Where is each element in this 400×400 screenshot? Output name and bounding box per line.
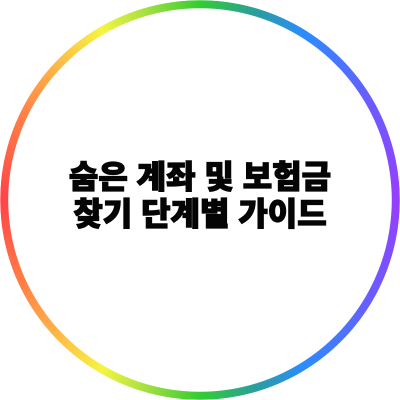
- title: 숨은 계좌 및 보험금: [69, 159, 331, 195]
- title: 찾기 단계별 가이드: [73, 196, 327, 232]
- title: [69, 159, 331, 232]
